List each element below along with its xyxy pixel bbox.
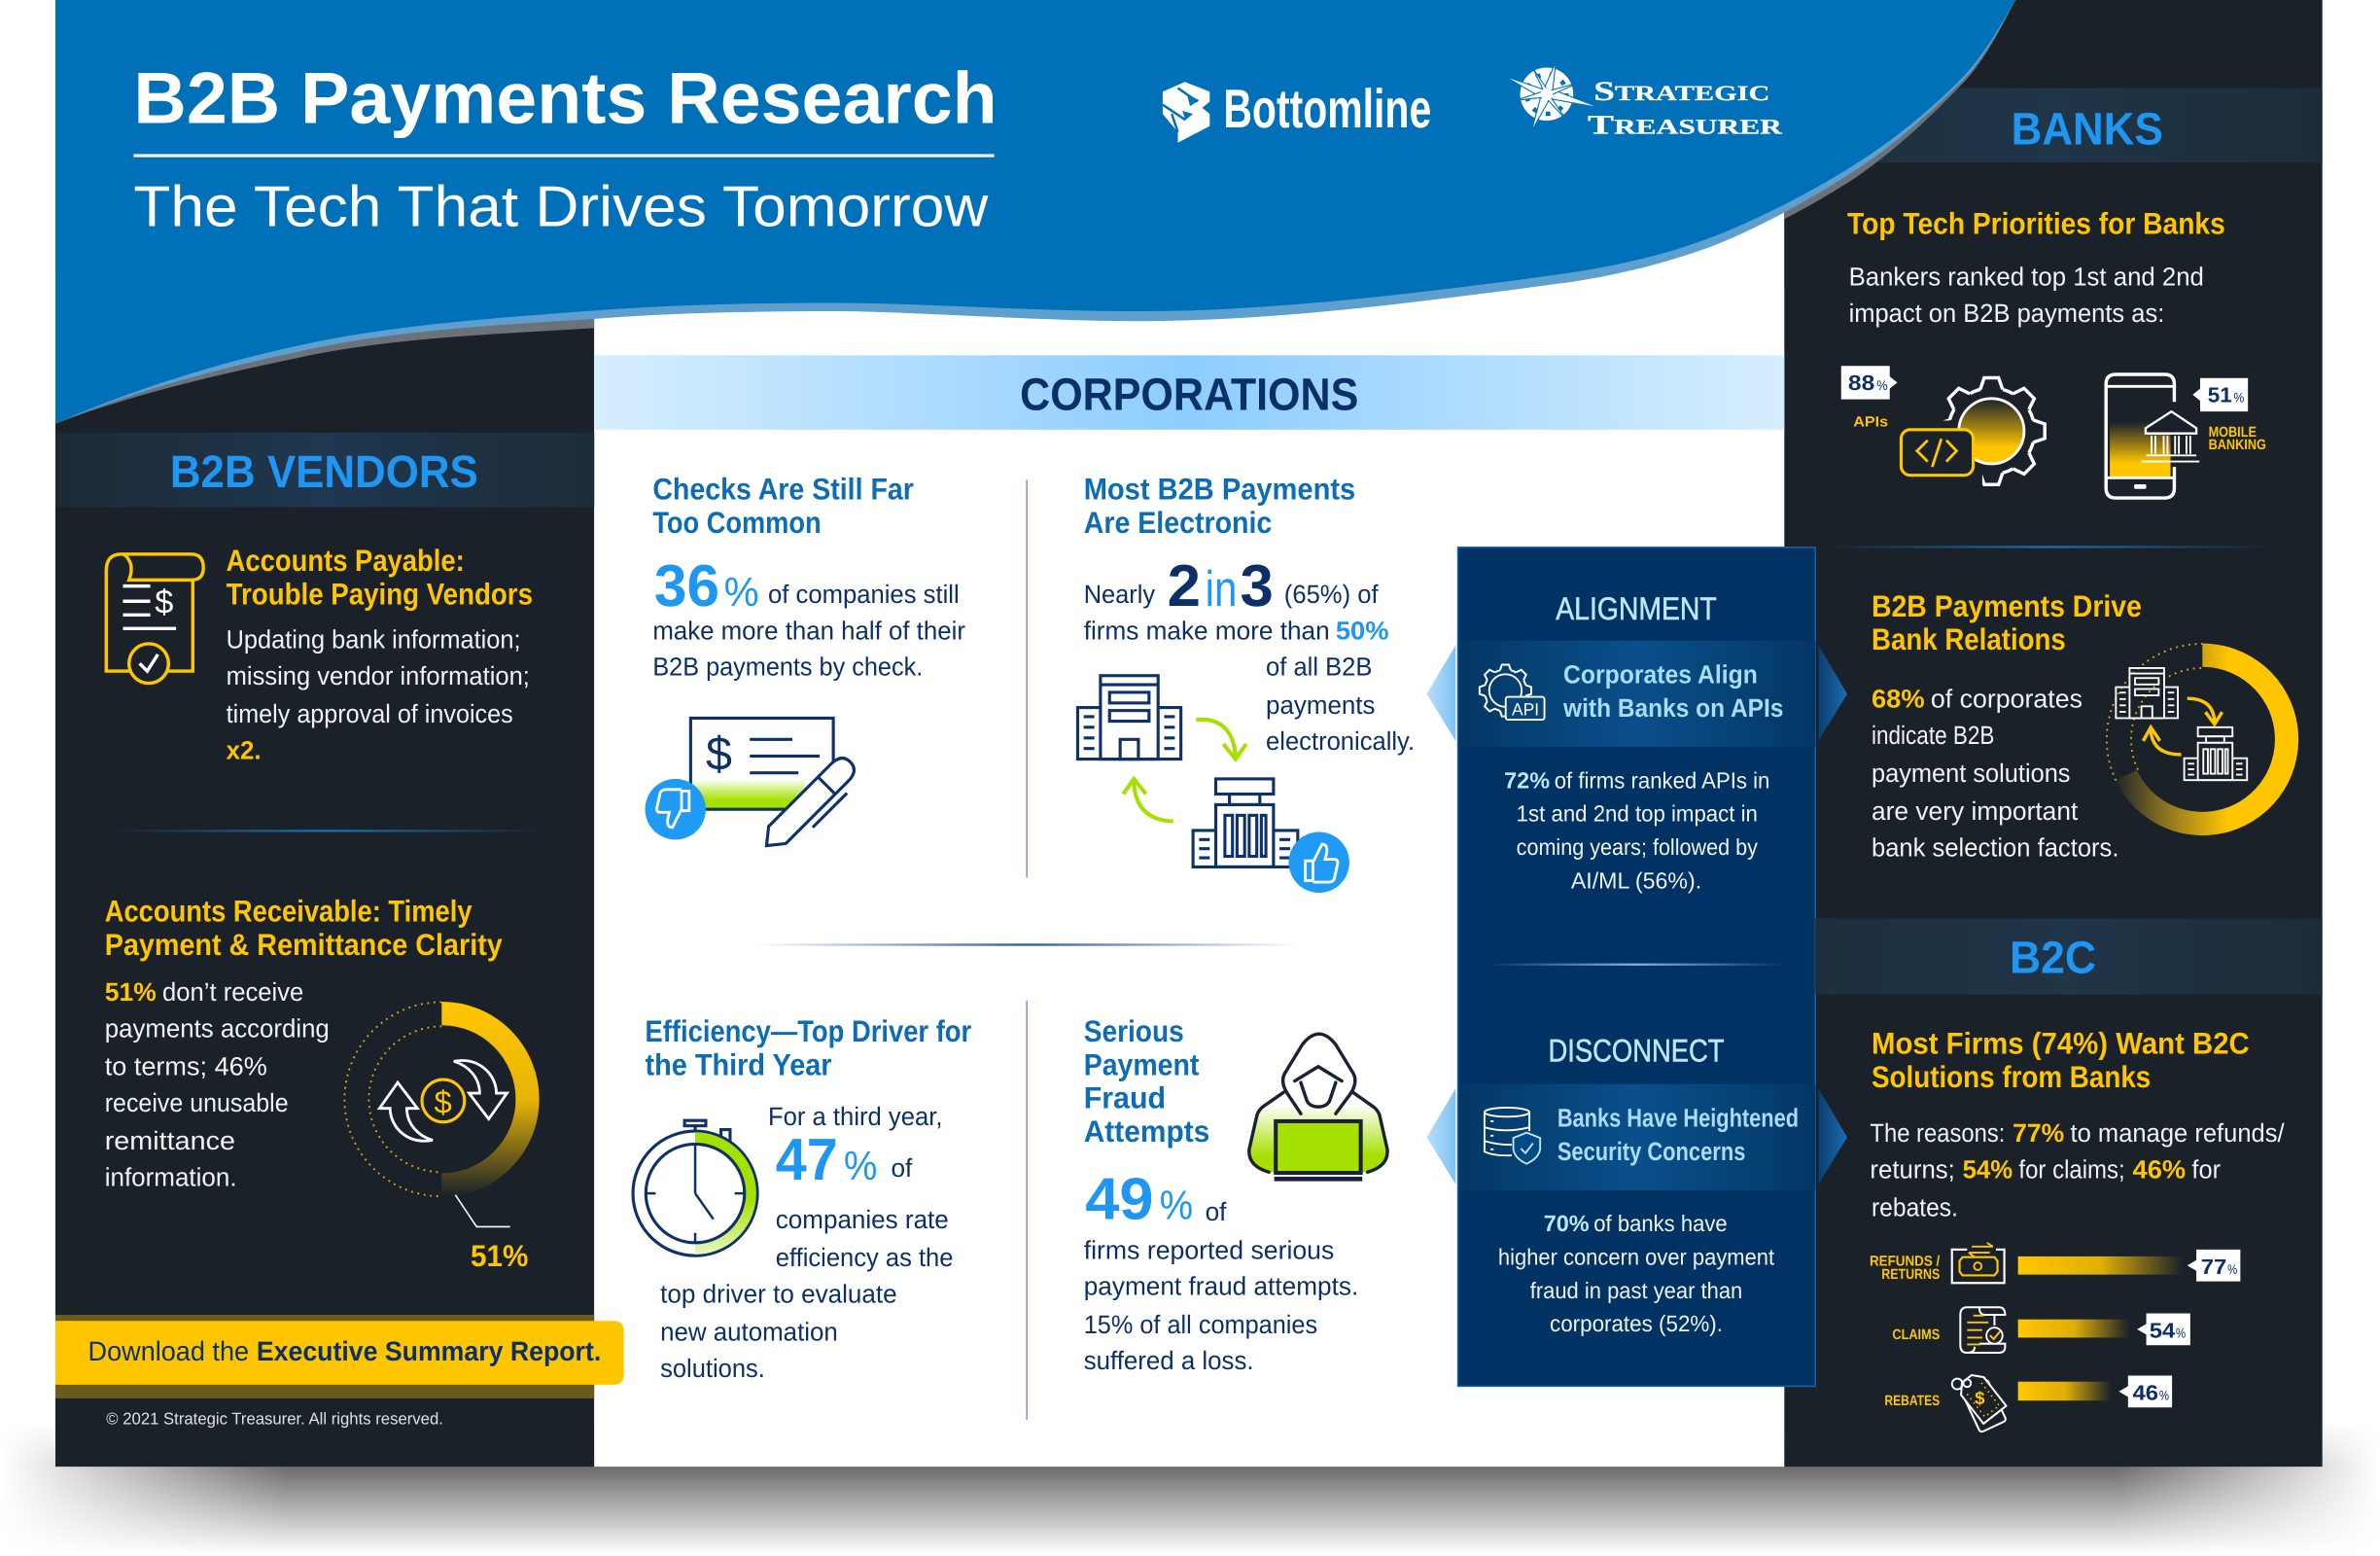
text: most firms want B2C: returns; xyxy=(1870,1155,1955,1185)
stat: 88% APIs: APIs xyxy=(1853,414,1888,431)
text: banks have heightened: Security Concerns xyxy=(1558,1137,1745,1166)
text: most firms want B2C: Solutions from Banks xyxy=(1872,1061,2151,1095)
text: 72% of firms: AI/ML (56%). xyxy=(1571,868,1701,895)
block: fraud attempts: 15% of all companies xyxy=(1084,1310,1317,1339)
logo: Bottomline xyxy=(1163,78,1431,143)
subtitle: The Tech That Drives Tomorrow xyxy=(133,176,989,240)
text: accounts receivable: remittance xyxy=(105,1126,235,1155)
text: 72% of firms: 72% xyxy=(1504,768,1550,795)
band: Corporations xyxy=(594,355,1784,430)
text: most firms want B2C: 46% xyxy=(2133,1155,2186,1185)
section: Corporations xyxy=(594,355,1784,1420)
block: efficiency: companies rate xyxy=(776,1206,949,1234)
icon: invoice scroll xyxy=(106,554,203,684)
text: accounts payable: Updating bank information; xyxy=(227,625,521,654)
section: Banks xyxy=(1821,105,2287,863)
block: fraud attempts: Attempts xyxy=(1084,1115,1209,1149)
block: fraud attempts: suffered a loss. xyxy=(1084,1347,1254,1375)
stat: 51% mobile banking: 51 xyxy=(2208,382,2232,407)
chart row: refunds / returns 77% xyxy=(1870,1243,2240,1284)
block: efficiency: For a third year, xyxy=(768,1102,943,1131)
icon: gear and code xyxy=(1893,378,2045,490)
icon: invoice scroll: $ xyxy=(155,584,173,621)
text: bank relations: B2B Payments Drive xyxy=(1872,590,2142,624)
text: accounts payable: missing vendor information; xyxy=(227,662,530,690)
icon: mobile banking phone xyxy=(2106,374,2199,498)
block: efficiency xyxy=(646,1015,971,1383)
icon: stopwatch xyxy=(633,1120,757,1255)
text: 72% of firms: coming years; followed by xyxy=(1517,835,1759,861)
text: bank relations xyxy=(1872,590,2142,863)
text: most firms want B2C: The reasons: xyxy=(1870,1119,2005,1148)
header edge highlight xyxy=(55,0,2015,424)
text: accounts receivable: 51% xyxy=(105,977,157,1007)
text: 70% of banks: corporates (52%). xyxy=(1550,1312,1723,1337)
block: efficiency: Efficiency—Top Driver for xyxy=(646,1015,971,1049)
call to action: download bar: Executive Summary Report. xyxy=(257,1336,601,1366)
chart row: rebates 46%: $ xyxy=(1975,1388,1985,1409)
chart: 51% donut: $ xyxy=(435,1085,452,1120)
block: fraud attempts: Serious xyxy=(1084,1015,1184,1049)
text: banks have heightened xyxy=(1558,1104,1799,1166)
text: top tech priorities xyxy=(1847,208,2225,328)
arrow: disconnect to b2c xyxy=(1818,1088,1847,1185)
text: 72% of firms: 1st and 2nd top impact in xyxy=(1517,801,1758,828)
block: electronic payments: of all B2B xyxy=(1266,653,1372,682)
icon: hacker xyxy=(1249,1034,1387,1182)
logo: Strategic Treasurer: S TRATEGIC xyxy=(1593,76,1769,106)
text: accounts receivable: Payment & Remittance Clarity xyxy=(105,929,504,963)
block: checks: make more than half of their xyxy=(652,617,965,646)
block: electronic payments: 2 xyxy=(1168,554,1201,619)
text: corporates align: with Banks on APIs xyxy=(1562,693,1783,723)
text: accounts payable: Trouble Paying Vendors xyxy=(227,579,533,612)
block: electronic payments: 3 xyxy=(1241,554,1274,619)
icon: api gear xyxy=(1480,664,1545,720)
block: efficiency: 47 xyxy=(776,1128,838,1193)
text: accounts payable: x2. xyxy=(227,736,262,765)
block: electronic payments: payments xyxy=(1266,690,1375,720)
block: efficiency: efficiency as the xyxy=(776,1244,953,1272)
text: accounts payable: Accounts Payable: xyxy=(227,545,465,579)
block: efficiency: solutions. xyxy=(660,1355,765,1383)
block: checks: of companies still xyxy=(768,580,960,609)
block: checks: 36 xyxy=(654,554,719,619)
chart row: claims 54%: % xyxy=(2176,1326,2186,1341)
text: most firms want B2C: for xyxy=(2191,1155,2222,1185)
text: accounts receivable: Accounts Receivable: Timely xyxy=(105,896,473,929)
text: accounts receivable: information. xyxy=(105,1163,237,1192)
logo: Strategic Treasurer: T REASURER xyxy=(1588,109,1784,140)
chart row: claims 54%: 54 xyxy=(2150,1318,2176,1342)
chart row: rebates 46%: 46 xyxy=(2133,1380,2158,1404)
band: B2C xyxy=(1815,919,2323,995)
text: most firms want B2C xyxy=(1870,1028,2285,1222)
text: top tech priorities: Top Tech Priorities for Banks xyxy=(1847,208,2225,241)
text: 70% of banks xyxy=(1498,1212,1775,1337)
text: bank relations: of corporates xyxy=(1931,685,2082,714)
chart: 68% donut xyxy=(2107,644,2287,824)
text: 70% of banks: fraud in past year than xyxy=(1530,1279,1742,1304)
stat: 51% mobile banking: % xyxy=(2233,390,2244,406)
stat: 51% mobile banking: MOBILE xyxy=(2209,425,2257,442)
chart row: refunds / returns 77%: RETURNS xyxy=(1881,1267,1940,1284)
stat: 88% APIs: 88 xyxy=(1848,371,1875,395)
band: security concerns xyxy=(1458,1084,1815,1190)
stat: 88% APIs: % xyxy=(1876,378,1888,393)
chart row: rebates 46%: REBATES xyxy=(1884,1394,1940,1410)
block: electronic payments: in xyxy=(1206,560,1237,617)
arrow: alignment to corporations xyxy=(1427,646,1455,741)
text: most firms want B2C: 54% xyxy=(1963,1155,2012,1185)
heading: Banks: BANKS xyxy=(2012,105,2163,155)
block: fraud attempts: firms reported serious xyxy=(1084,1236,1334,1264)
text: corporates align xyxy=(1562,660,1783,723)
icon: api gear: API xyxy=(1512,701,1539,720)
arrow: disconnect to corporations xyxy=(1427,1088,1455,1185)
block: efficiency: new automation xyxy=(660,1318,838,1347)
chart row: rebates 46%: % xyxy=(2159,1388,2169,1403)
chart row: refunds / returns 77%: REFUNDS / xyxy=(1870,1254,1941,1270)
text: top tech priorities: impact on B2B payments as: xyxy=(1849,300,2164,328)
text: accounts receivable xyxy=(105,896,504,1192)
page drop shadow xyxy=(16,1430,2365,1550)
logo: Strategic Treasurer xyxy=(1504,62,1784,140)
text: most firms want B2C: to manage refunds/ xyxy=(2071,1119,2285,1148)
block: checks: Checks Are Still Far xyxy=(652,474,914,507)
block: electronic payments: (65%) of xyxy=(1284,580,1379,609)
block: efficiency: top driver to evaluate xyxy=(660,1280,897,1309)
text: most firms want B2C: Most Firms (74%) Want B2C xyxy=(1872,1028,2250,1061)
text: accounts receivable: receive unusable xyxy=(105,1088,289,1117)
text: bank relations: payment solutions xyxy=(1872,760,2071,788)
stat: 88% APIs xyxy=(1841,366,1898,431)
stat: 51% mobile banking: BANKING xyxy=(2209,438,2266,454)
chart row: refunds / returns 77%: % xyxy=(2227,1261,2237,1277)
heading: disconnect: DISCONNECT xyxy=(1548,1034,1725,1069)
band: Banks xyxy=(1784,88,2323,162)
text: 70% of banks: higher concern over payment xyxy=(1498,1245,1775,1271)
band: B2B Vendors xyxy=(55,433,594,507)
block: electronic payments: Nearly xyxy=(1084,580,1156,609)
title: B2B Payments Research xyxy=(133,59,998,140)
heading: B2B Vendors: B2B VENDORS xyxy=(170,448,478,498)
block: fraud attempts: payment fraud attempts. xyxy=(1084,1272,1358,1301)
logo: Bottomline: Bottomline xyxy=(1223,78,1431,140)
band: corporates align xyxy=(1458,641,1815,747)
section: B2C xyxy=(1815,919,2323,1432)
chart row: refunds / returns 77%: 77 xyxy=(2201,1255,2227,1279)
block: efficiency: % xyxy=(844,1144,877,1188)
heading: Corporations: CORPORATIONS xyxy=(1020,371,1358,420)
block: efficiency: the Third Year xyxy=(646,1049,832,1082)
block: fraud attempts: Fraud xyxy=(1084,1082,1166,1115)
text: accounts receivable: to terms; 46% xyxy=(105,1052,267,1081)
text: accounts payable: timely approval of invoices xyxy=(227,700,513,728)
text: most firms want B2C: 77% xyxy=(2012,1119,2064,1148)
header: blue banner xyxy=(55,0,2015,424)
block: fraud attempts xyxy=(1084,1015,1358,1375)
text: bank relations: Bank Relations xyxy=(1872,624,2066,657)
block: fraud attempts: 49 xyxy=(1085,1168,1154,1233)
icon: buildings with exchange arrows xyxy=(1077,676,1349,893)
chart: 51% donut xyxy=(344,1002,529,1274)
block: fraud attempts: Payment xyxy=(1084,1049,1200,1082)
text: bank relations: are very important xyxy=(1872,797,2079,826)
chart row: claims 54% xyxy=(1892,1307,2190,1353)
block: electronic payments: 50% xyxy=(1336,617,1389,646)
panel: center white column xyxy=(594,289,1784,1467)
call to action: download bar xyxy=(55,1315,624,1398)
block: electronic payments: firms make more than xyxy=(1084,617,1330,646)
text: accounts receivable: don’t receive xyxy=(162,977,303,1007)
text: banks have heightened: Banks Have Heightened xyxy=(1558,1104,1799,1133)
block: electronic payments: Are Electronic xyxy=(1084,507,1272,541)
header edge shadow on dark panels xyxy=(55,0,2015,424)
block: fraud attempts: % xyxy=(1160,1183,1193,1228)
title rule xyxy=(133,154,995,158)
text: bank relations: 68% xyxy=(1872,685,1925,714)
text: accounts receivable: payments according xyxy=(105,1014,330,1043)
chart row: claims 54%: CLAIMS xyxy=(1892,1327,1940,1344)
block: checks: % xyxy=(724,569,759,615)
text: 70% of banks: of banks have xyxy=(1593,1212,1728,1237)
copyright: © 2021 Strategic Treasurer. All rights reserved. xyxy=(106,1410,443,1429)
heading: B2C: B2C xyxy=(2010,934,2096,984)
panel: right dark column xyxy=(1784,0,2323,1467)
icon: check and pen: $ xyxy=(706,727,732,780)
section: B2B Vendors xyxy=(55,433,624,1429)
panel: alignment and disconnect xyxy=(1458,548,1815,1386)
text: 72% of firms xyxy=(1504,768,1769,895)
block: efficiency: of xyxy=(891,1154,913,1183)
text: corporates align: Corporates Align xyxy=(1563,660,1758,690)
text: accounts payable xyxy=(227,545,533,765)
block: fraud attempts: of xyxy=(1206,1198,1227,1226)
text: bank relations: indicate B2B xyxy=(1872,722,1994,750)
block: electronic payments: Most B2B Payments xyxy=(1084,474,1355,507)
block: checks: B2B payments by check. xyxy=(652,653,923,682)
chart row: rebates 46% xyxy=(1884,1370,2172,1432)
block: electronic payments xyxy=(1084,474,1415,756)
block: checks: Too Common xyxy=(652,507,822,541)
arrow: alignment to banks xyxy=(1818,646,1847,741)
panel: left dark column xyxy=(55,273,594,1467)
block: checks xyxy=(652,474,965,682)
text: most firms want B2C: rebates. xyxy=(1872,1193,1958,1222)
heading: alignment: ALIGNMENT xyxy=(1556,592,1717,627)
stat: 51% mobile banking xyxy=(2192,378,2266,454)
text: bank relations: bank selection factors. xyxy=(1872,833,2118,863)
icon: database shield xyxy=(1485,1108,1540,1164)
text: 70% of banks: 70% xyxy=(1544,1212,1590,1237)
icon: check and pen xyxy=(646,718,864,860)
chart: 51% donut: 51% xyxy=(471,1241,529,1274)
text: 72% of firms: of firms ranked APIs in xyxy=(1555,768,1769,795)
text: top tech priorities: Bankers ranked top 1st and 2nd xyxy=(1849,263,2204,292)
block: electronic payments: electronically. xyxy=(1266,727,1415,756)
text: most firms want B2C: for claims; xyxy=(2018,1155,2125,1185)
call to action: download bar: Download the xyxy=(88,1336,249,1366)
